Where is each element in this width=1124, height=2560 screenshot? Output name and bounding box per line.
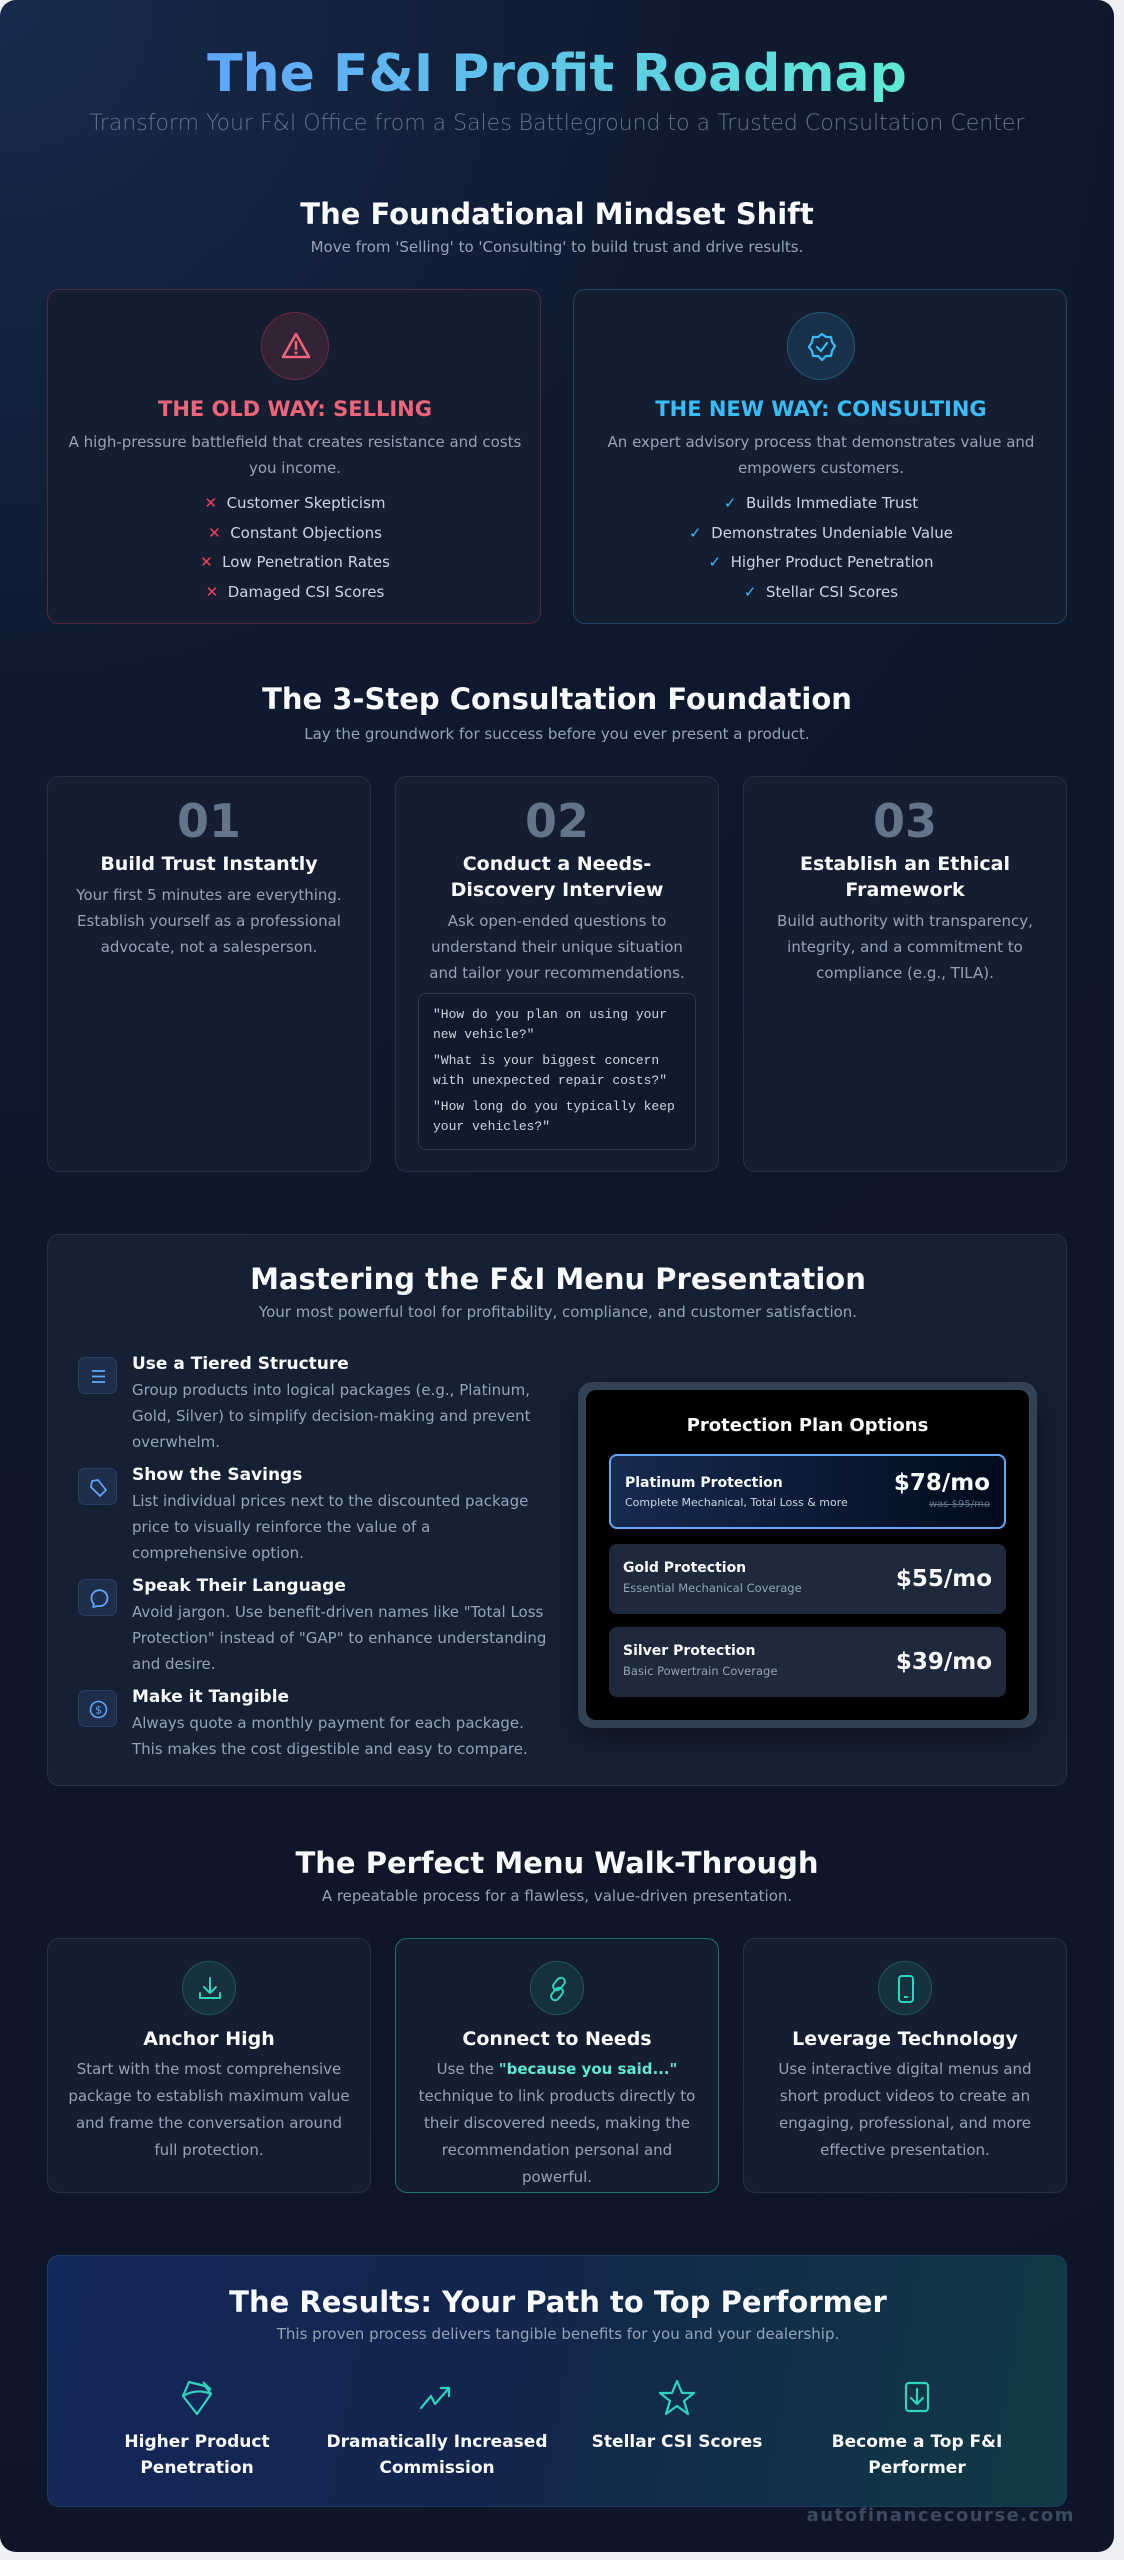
icon: gem bbox=[182, 2380, 212, 2416]
old way list: ✕ Constant Objections bbox=[208, 524, 382, 542]
text: Use interactive digital menus and short product videos to create an engaging, professional, and more effective presentation. bbox=[778, 2060, 1032, 2159]
tip: tiered structure: Group products into logical packages (e.g., Platinum, Gold, Silver) to simplify decision-making and prevent overwhelm. bbox=[132, 1381, 530, 1451]
icon: badge check bbox=[787, 312, 855, 380]
step text: Build authority with transparency, integrity, and a commitment to compliance (e.g., TILA). bbox=[777, 912, 1033, 982]
question box: "What is your biggest concern with unexpected repair costs?" bbox=[433, 1053, 667, 1088]
icon: download box bbox=[904, 2382, 930, 2412]
result: commission bbox=[326, 2386, 548, 2478]
tip: speak their language: Speak Their Language bbox=[132, 1576, 346, 1596]
panel: step 03 bbox=[743, 776, 1067, 1172]
result: penetration: Higher Product bbox=[124, 2432, 270, 2452]
heading: mindset shift: The Foundational Mindset Shift bbox=[300, 197, 814, 231]
icon: dollar bbox=[78, 1690, 117, 1727]
panel: step 02 bbox=[395, 776, 719, 1172]
plan: platinum: Platinum Protection bbox=[625, 1475, 783, 1491]
result: commission: Commission bbox=[379, 2458, 495, 2478]
tip: speak their language: Avoid jargon. Use benefit-driven names like "Total Loss Protection" instead of "GAP" to enhance understanding and desire. bbox=[132, 1603, 546, 1673]
panel: anchor high bbox=[47, 1938, 371, 2193]
old way title: THE OLD WAY: SELLING bbox=[158, 397, 432, 421]
heading: 3-step: The 3-Step Consultation Foundation bbox=[262, 682, 852, 716]
result: csi: Stellar CSI Scores bbox=[592, 2432, 762, 2452]
number 03: 03 bbox=[873, 794, 937, 848]
icon: star bbox=[658, 2380, 696, 2416]
plan: platinum: $78/mo bbox=[894, 1470, 990, 1496]
icon: dollar: $ bbox=[95, 1704, 102, 1716]
plan: silver: Basic Powertrain Coverage bbox=[623, 1664, 777, 1678]
tip: tiered structure: Use a Tiered Structure bbox=[132, 1354, 349, 1374]
tip: make tangible: Make it Tangible bbox=[132, 1687, 289, 1707]
title: Leverage Technology bbox=[792, 2028, 1018, 2050]
old way list bbox=[200, 494, 390, 600]
title: The F&I Profit Roadmap bbox=[207, 44, 907, 104]
title: Anchor High bbox=[143, 2028, 275, 2050]
tip: show savings: List individual prices next to the discounted package price to visually reinforce the value of a comprehensive option. bbox=[132, 1492, 528, 1562]
result: penetration: Penetration bbox=[140, 2458, 254, 2478]
panel: connect to needs bbox=[395, 1938, 719, 2193]
icon: phone bbox=[878, 1961, 932, 2015]
panel: step 01 bbox=[47, 776, 371, 1172]
result: penetration bbox=[124, 2380, 270, 2478]
subheading: results: This proven process delivers tangible benefits for you and your dealership. bbox=[277, 2325, 839, 2343]
plan: gold bbox=[609, 1544, 1006, 1614]
tip: make tangible bbox=[78, 1687, 528, 1758]
new way list: ✓ Higher Product Penetration bbox=[709, 553, 933, 571]
plan: platinum bbox=[609, 1454, 1006, 1529]
result: top performer: Performer bbox=[868, 2458, 966, 2478]
step title: Build Trust Instantly bbox=[100, 853, 318, 875]
plan: platinum: Complete Mechanical, Total Loss & more bbox=[625, 1496, 848, 1509]
plan: gold: Gold Protection bbox=[623, 1560, 746, 1576]
tip: make tangible: Always quote a monthly payment for each package. This makes the cost digestible and easy to compare. bbox=[132, 1714, 528, 1758]
old way list: ✕ Customer Skepticism bbox=[204, 494, 386, 512]
subheading: walk-through: A repeatable process for a flawless, value-driven presentation. bbox=[322, 1887, 792, 1905]
title: Connect to Needs bbox=[462, 2028, 652, 2050]
new way description: An expert advisory process that demonstrates value and empowers customers. bbox=[608, 433, 1034, 477]
heading: walk-through: The Perfect Menu Walk-Through bbox=[296, 1846, 818, 1880]
heading: menu: Mastering the F&I Menu Presentation bbox=[250, 1262, 866, 1296]
tip: show savings: Show the Savings bbox=[132, 1465, 302, 1485]
icon: trend up bbox=[420, 2386, 450, 2410]
icon: speech bubble bbox=[78, 1579, 117, 1616]
question box: "How long do you typically keep your vehicles?" bbox=[433, 1099, 675, 1134]
watermark: autofinancecourse.com bbox=[807, 2505, 1075, 2526]
text: Use the "because you said..." technique to link products directly to their discovered needs, making the recommendation personal and powerful. bbox=[419, 2060, 695, 2186]
panel: leverage technology bbox=[743, 1938, 1067, 2193]
subtitle: Transform Your F&I Office from a Sales Battleground to a Trusted Consultation Center bbox=[90, 111, 1024, 136]
question box: "How do you plan on using your new vehicle?" bbox=[433, 1007, 667, 1042]
icon: list bbox=[78, 1357, 117, 1394]
new way list: ✓ Stellar CSI Scores bbox=[744, 582, 898, 600]
old way list: ✕ Damaged CSI Scores bbox=[206, 582, 384, 600]
plan: silver: $39/mo bbox=[896, 1649, 992, 1675]
panel: results bbox=[47, 2255, 1067, 2507]
icon: link bbox=[530, 1961, 584, 2015]
panel: old way bbox=[47, 289, 541, 624]
result: top performer bbox=[832, 2382, 1002, 2478]
result: commission: Dramatically Increased bbox=[326, 2432, 548, 2452]
icon: warning bbox=[261, 312, 329, 380]
tip: show savings bbox=[78, 1465, 528, 1562]
plan: gold: Essential Mechanical Coverage bbox=[623, 1581, 802, 1595]
old way list: ✕ Low Penetration Rates bbox=[200, 553, 390, 571]
step text: Ask open-ended questions to understand their unique situation and tailor your recommendations. bbox=[429, 912, 685, 982]
text: Start with the most comprehensive package to establish maximum value and frame the conversation around full protection. bbox=[68, 2060, 350, 2159]
plan: silver bbox=[609, 1627, 1006, 1697]
plan: gold: $55/mo bbox=[896, 1566, 992, 1592]
plan: silver: Silver Protection bbox=[623, 1643, 755, 1659]
old way description: A high-pressure battlefield that creates resistance and costs you income. bbox=[69, 433, 521, 477]
tip: speak their language bbox=[78, 1576, 546, 1673]
new way list: ✓ Builds Immediate Trust bbox=[724, 494, 918, 512]
tip: tiered structure bbox=[78, 1354, 530, 1451]
step title: Establish an Ethical Framework bbox=[800, 853, 1010, 901]
icon: download bbox=[182, 1961, 236, 2015]
new way list: ✓ Demonstrates Undeniable Value bbox=[689, 524, 953, 542]
step title: Conduct a Needs-Discovery Interview bbox=[451, 853, 663, 901]
heading: results: The Results: Your Path to Top Performer bbox=[229, 2285, 887, 2319]
question box bbox=[418, 993, 696, 1150]
subheading: 3-step: Lay the groundwork for success before you ever present a product. bbox=[304, 725, 810, 743]
plan: platinum: was $95/mo bbox=[929, 1499, 990, 1510]
menu device mockup bbox=[578, 1382, 1037, 1728]
panel: new way bbox=[573, 289, 1067, 624]
icon: tag bbox=[78, 1468, 117, 1505]
new way title: THE NEW WAY: CONSULTING bbox=[655, 397, 987, 421]
subheading: menu: Your most powerful tool for profitability, compliance, and customer satisfaction. bbox=[259, 1303, 857, 1321]
result: top performer: Become a Top F&I bbox=[832, 2432, 1002, 2452]
result: csi bbox=[592, 2380, 762, 2452]
number 02: 02 bbox=[525, 794, 589, 848]
menu title: Protection Plan Options bbox=[687, 1415, 928, 1436]
number 01: 01 bbox=[177, 794, 241, 848]
subheading: mindset shift: Move from 'Selling' to 'Consulting' to build trust and drive results. bbox=[311, 238, 803, 256]
panel: menu presentation bbox=[47, 1234, 1067, 1786]
new way list bbox=[689, 494, 953, 600]
step text: Your first 5 minutes are everything. Establish yourself as a professional advocate, not a salesperson. bbox=[76, 886, 342, 956]
